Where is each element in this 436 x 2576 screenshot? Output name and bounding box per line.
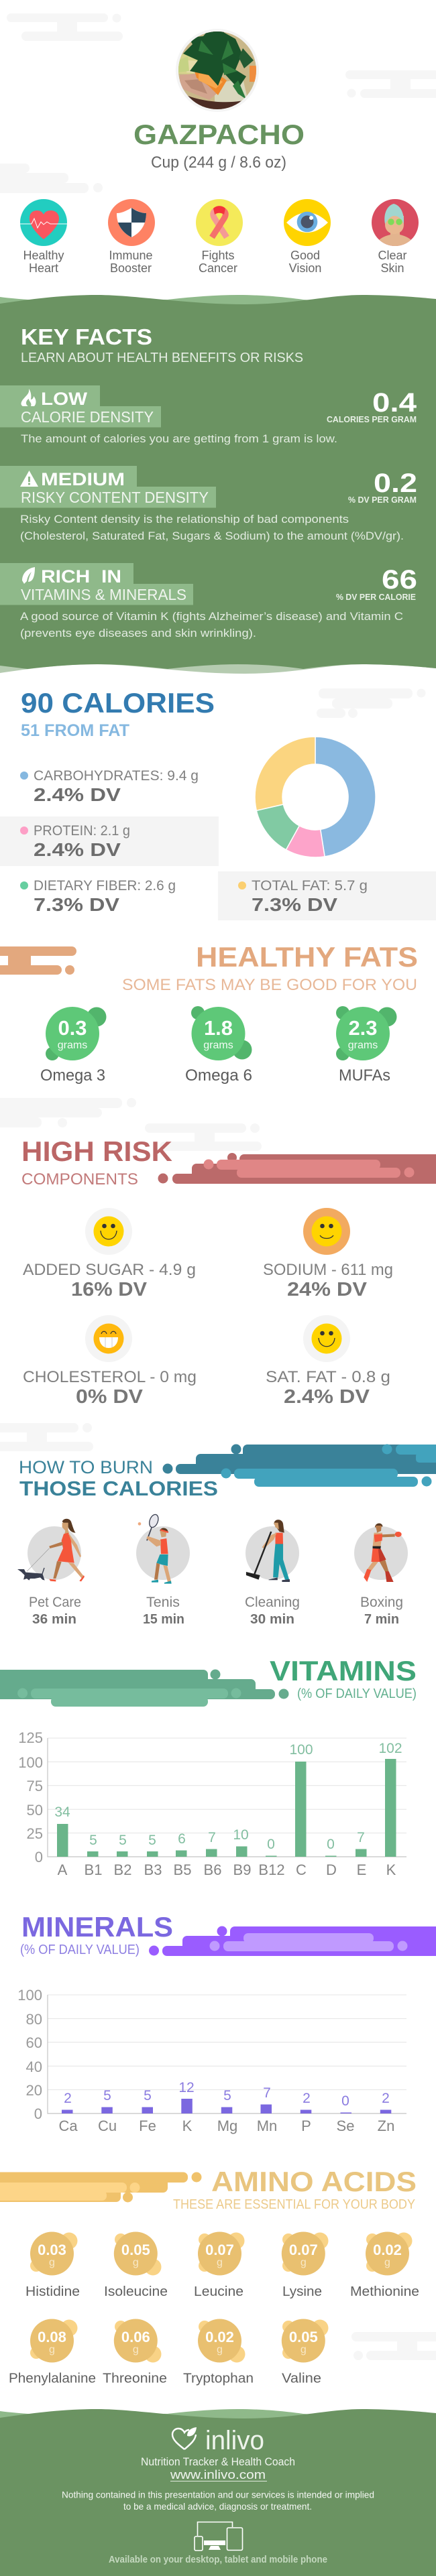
amino acid: tryptophan: 0.02 (205, 2329, 234, 2345)
bar chart: vitamins: B3 (144, 1861, 162, 1878)
label: fights cancer: Fights (201, 249, 235, 262)
subheading: LEARN ABOUT HEALTH BENEFITS OR RISKS (21, 351, 303, 365)
activity: tennis: Tenis (146, 1595, 180, 1610)
bar chart: vitamins: B5 (174, 1861, 191, 1878)
amino acid: leucine: g (217, 2257, 223, 2268)
activity: cleaning (245, 1520, 300, 1627)
bar chart: minerals: 20 (26, 2082, 42, 2099)
label: healthy heart: Heart (29, 261, 58, 275)
title: GAZPACHO (133, 119, 305, 150)
bar chart: vitamins: 7 (357, 1830, 365, 1845)
fat: omega 3 (40, 1007, 106, 1085)
legend: carbohydrates: 2.4% DV (34, 784, 121, 805)
panel: calories (0, 687, 436, 920)
bar chart: vitamins: 0 (267, 1837, 275, 1852)
label: clear skin: Clear (378, 249, 407, 262)
amino acid: histidine (25, 2232, 80, 2299)
bar chart: vitamins: B2 (114, 1861, 131, 1878)
panel: how to burn those calories (17, 1444, 436, 1627)
legend: protein (0, 816, 219, 866)
bar chart: vitamins: 5 (119, 1833, 127, 1848)
bar chart: vitamins: 10 (233, 1827, 249, 1843)
fact: medium risky content density: (Cholesterol, Saturated Fat, Sugars & Sodium) to the amount (%DV/gr). (20, 530, 404, 542)
item: added sugar (23, 1208, 196, 1300)
label: good vision: Vision (289, 261, 321, 275)
bar chart: minerals: 12 (178, 2080, 195, 2095)
fat: omega 3: Omega 3 (40, 1066, 105, 1085)
bar chart: vitamins: K (386, 1861, 396, 1878)
item: saturated fat: 2.4% DV (284, 1386, 370, 1408)
legend: dietary fiber (20, 878, 176, 915)
amino acid: isoleucine: 0.05 (121, 2242, 150, 2258)
subheading: components: COMPONENTS (21, 1170, 138, 1188)
fat: omega 3: grams (58, 1040, 87, 1051)
activity: cleaning: Cleaning (245, 1595, 300, 1610)
fat: mufas (336, 1006, 397, 1085)
legend: total fat: TOTAL FAT: 5.7 g (252, 878, 368, 894)
bar chart: minerals: 2 (382, 2091, 390, 2106)
item: added sugar: 16% DV (71, 1279, 148, 1300)
bar chart: vitamins: A (58, 1861, 68, 1878)
icon: clear skin face (372, 199, 419, 248)
fat: mufas: grams (348, 1040, 378, 1051)
bar chart: vitamins: 5 (148, 1833, 156, 1848)
bar chart: vitamins: B9 (233, 1861, 251, 1878)
label: immune booster: Immune (109, 249, 153, 262)
activity: boxing: 7 min (364, 1612, 399, 1627)
amino acid: valine: g (301, 2344, 307, 2355)
activity: pet care: 36 min (32, 1612, 76, 1627)
disclaimer: to be a medical advice, diagnosis or treatment. (123, 2501, 312, 2512)
logo: inlivo (205, 2426, 264, 2455)
amino acid: methionine: g (384, 2257, 390, 2268)
subheading: (% OF DAILY VALUE) (20, 1943, 140, 1957)
bar chart: minerals: 7 (263, 2085, 271, 2101)
fact: rich in vitamins and minerals: RICH IN (41, 566, 121, 587)
fact: rich in vitamins and minerals: (prevents eye diseases and skin wrinkling). (20, 627, 256, 639)
activity: pet care: Pet Care (29, 1595, 81, 1610)
bar chart: minerals: Ca (58, 2118, 78, 2134)
fact: low calorie density: The amount of calories you are getting from 1 gram is low. (21, 432, 337, 445)
amino acid: tryptophan: g (217, 2344, 223, 2355)
bar chart: vitamins: 0 (35, 1849, 43, 1865)
amino acid: histidine: g (49, 2257, 55, 2268)
bar chart: minerals: 5 (144, 2088, 152, 2103)
amino acid: valine: 0.05 (289, 2329, 318, 2345)
heading: vitamins: VITAMINS (270, 1655, 417, 1686)
bar chart: vitamins: 6 (178, 1831, 186, 1847)
bar chart: vitamins (18, 1729, 406, 1878)
bar chart: vitamins: 5 (89, 1833, 97, 1848)
subheading: THESE ARE ESSENTIAL FOR YOUR BODY (173, 2197, 415, 2212)
bar chart: vitamins: 34 (54, 1804, 70, 1820)
fact: low calorie density: CALORIES PER GRAM (327, 414, 417, 424)
fat: mufas: 2.3 (348, 1016, 378, 1040)
legend: carbohydrates: CARBOHYDRATES: 9.4 g (34, 768, 199, 784)
amino acid: tryptophan (183, 2319, 254, 2386)
amino acid: lysine: g (301, 2257, 307, 2268)
icon: healthy heart (20, 199, 67, 246)
bar chart: minerals: P (301, 2118, 311, 2134)
activity: tennis (136, 1514, 190, 1627)
bar chart: vitamins: 50 (27, 1802, 43, 1819)
benefit icons (20, 199, 419, 275)
amino acid: threonine (103, 2319, 167, 2386)
bar chart: vitamins: 100 (289, 1742, 313, 1758)
amino acid: methionine (350, 2232, 419, 2299)
item: sodium: SODIUM - 611 mg (263, 1261, 393, 1279)
food photo (176, 28, 259, 115)
amino acid: phenylalanine: g (49, 2344, 55, 2355)
legend: protein: PROTEIN: 2.1 g (34, 823, 130, 839)
amino acid: histidine: 0.03 (38, 2242, 66, 2258)
heading: amino acids: AMINO ACIDS (211, 2166, 417, 2197)
icon: immune booster shield (108, 199, 155, 246)
label: immune booster: Booster (110, 261, 152, 275)
amino acid: threonine: Threonine (103, 2372, 167, 2386)
figure: tennis player (138, 1514, 172, 1584)
bar chart: minerals: 40 (26, 2059, 42, 2075)
item: cholesterol: 0% DV (76, 1386, 144, 1408)
bar chart: vitamins: D (326, 1861, 337, 1878)
bar chart: minerals: 2 (64, 2091, 72, 2106)
bar chart: vitamins: 25 (27, 1825, 43, 1842)
heading: 90 calories: 90 CALORIES (21, 687, 215, 719)
activity: cleaning: 30 min (250, 1612, 294, 1627)
heading: high risk: HIGH RISK (21, 1136, 172, 1167)
fact: medium risky content density (0, 466, 417, 542)
bar chart: vitamins: 0 (327, 1837, 335, 1852)
heading: those calories: THOSE CALORIES (19, 1477, 218, 1500)
heading: key facts: KEY FACTS (21, 324, 152, 349)
decorative banner (0, 1669, 288, 1707)
icon: flame (21, 389, 36, 406)
fact: medium risky content density: MEDIUM (41, 469, 125, 489)
panel: high risk components (21, 1136, 436, 1408)
decorative banner (149, 1926, 436, 1956)
decorative banner (158, 1153, 436, 1184)
figure: boxer (364, 1523, 402, 1582)
figure: person sweeping (246, 1520, 290, 1582)
tagline: Nutrition Tracker & Health Coach (141, 2455, 295, 2468)
panel: vitamins (0, 1655, 417, 1878)
bar chart: minerals (17, 1987, 406, 2134)
bar chart: minerals: Fe (139, 2118, 156, 2134)
bar chart: minerals: Cu (98, 2118, 117, 2134)
heading: minerals: MINERALS (21, 1911, 173, 1943)
bar chart: vitamins: B12 (258, 1861, 285, 1878)
fact: low calorie density: CALORIE DENSITY (21, 408, 154, 426)
amino acid: valine: Valine (282, 2372, 321, 2386)
disclaimer: Nothing contained in this presentation and our services is intended or implied (62, 2490, 374, 2500)
panel: amino acids (0, 2166, 419, 2386)
donut chart (255, 737, 376, 857)
fact: medium risky content density: RISKY CONTENT DENSITY (21, 489, 209, 506)
amino acid: histidine: Histidine (25, 2284, 80, 2299)
bar chart: minerals: 60 (26, 2034, 42, 2051)
fat: mufas: MUFAs (339, 1066, 390, 1085)
subheading: 51 from fat: 51 FROM FAT (21, 721, 129, 740)
fat: omega 6: 1.8 (204, 1016, 233, 1040)
legend: carbohydrates (20, 768, 199, 805)
figure: woman walking dog (17, 1519, 85, 1581)
amino acid: isoleucine (104, 2232, 168, 2299)
legend: total fat (218, 871, 436, 920)
activity: boxing (354, 1523, 408, 1627)
fact: rich in vitamins and minerals: % DV PER CALORIE (336, 592, 416, 602)
decorative banner (162, 1444, 436, 1487)
panel: key facts (0, 295, 436, 674)
bar chart: vitamins: 75 (27, 1778, 43, 1794)
legend: dietary fiber: DIETARY FIBER: 2.6 g (34, 878, 176, 894)
item: sodium (263, 1208, 393, 1300)
bar chart: minerals: 5 (223, 2088, 231, 2103)
bar chart: vitamins: B6 (204, 1861, 221, 1878)
icon: fights cancer ribbon (196, 199, 243, 246)
item: cholesterol: CHOLESTEROL - 0 mg (23, 1368, 197, 1386)
subheading: (% OF DAILY VALUE) (297, 1686, 417, 1701)
bar chart: minerals: Se (337, 2118, 354, 2134)
label: healthy heart: Healthy (23, 249, 64, 262)
item: saturated fat (266, 1315, 390, 1408)
heading: how to burn: HOW TO BURN (19, 1457, 153, 1477)
label: fights cancer: Cancer (199, 261, 237, 275)
fact: medium risky content density: Risky Content density is the relationship of bad components (20, 513, 349, 526)
icon: warning triangle (20, 471, 38, 487)
amino acid: methionine: Methionine (350, 2284, 419, 2299)
amino acid: leucine: 0.07 (205, 2242, 234, 2258)
amino acid: lysine (282, 2232, 329, 2299)
icon: leaf (22, 567, 35, 584)
amino acid: isoleucine: Isoleucine (104, 2284, 168, 2299)
logo (172, 2426, 264, 2455)
bar chart: vitamins: C (296, 1861, 307, 1878)
fact: rich in vitamins and minerals (0, 563, 417, 639)
fact: low calorie density: LOW (41, 389, 88, 409)
item: saturated fat: SAT. FAT - 0.8 g (266, 1368, 390, 1386)
label: clear skin: Skin (380, 261, 404, 275)
heading: healthy fats: HEALTHY FATS (196, 941, 418, 973)
fat: omega 3: 0.3 (58, 1016, 87, 1040)
fact: medium risky content density: % DV PER GRAM (348, 495, 417, 505)
bar chart: minerals: Mg (217, 2118, 237, 2134)
fact: medium risky content density: 0.2 (374, 469, 417, 498)
bar chart: minerals: 0 (341, 2093, 349, 2109)
icon: devices (195, 2522, 243, 2551)
bar chart: vitamins: 102 (378, 1741, 402, 1756)
amino acid: valine (282, 2319, 329, 2386)
fact: low calorie density: 0.4 (372, 388, 417, 418)
amino acid: phenylalanine (9, 2319, 96, 2386)
fact: rich in vitamins and minerals: VITAMINS & MINERALS (21, 586, 186, 603)
panel: minerals (17, 1911, 436, 2134)
footer (0, 2409, 436, 2576)
amino acid: leucine (194, 2232, 244, 2299)
bar chart: minerals: 80 (26, 2011, 42, 2028)
availability note: Available on your desktop, tablet and mobile phone (109, 2555, 327, 2565)
item: sodium: 24% DV (287, 1279, 368, 1300)
amino acid: lysine: Lysine (282, 2284, 322, 2299)
label: good vision: Good (290, 249, 320, 262)
bar chart: vitamins: 100 (18, 1754, 43, 1771)
bar chart: minerals: K (182, 2118, 193, 2134)
website: www.inlivo.com (170, 2468, 266, 2481)
amino acid: phenylalanine: Phenylalanine (9, 2372, 96, 2386)
fact: rich in vitamins and minerals: 66 (382, 565, 417, 595)
bar chart: minerals: 5 (103, 2088, 111, 2103)
fat: omega 6 (185, 1006, 252, 1085)
amino acid: lysine: 0.07 (289, 2242, 318, 2258)
header (133, 28, 305, 172)
serving size: Cup (244 g / 8.6 oz) (151, 154, 286, 172)
bar chart: minerals: 0 (34, 2105, 42, 2122)
activity: tennis: 15 min (143, 1612, 184, 1627)
item: cholesterol (23, 1315, 197, 1408)
legend: protein: 2.4% DV (34, 839, 121, 860)
amino acid: leucine: Leucine (194, 2284, 243, 2299)
legend: total fat: 7.3% DV (252, 894, 337, 915)
decorative banner (0, 2172, 201, 2203)
bar chart: minerals: 2 (303, 2091, 311, 2106)
activity: pet care (17, 1519, 85, 1627)
item: added sugar: ADDED SUGAR - 4.9 g (23, 1261, 196, 1279)
bar chart: vitamins: 7 (208, 1830, 216, 1845)
amino acid: phenylalanine: 0.08 (38, 2329, 66, 2345)
bar chart: minerals: 100 (17, 1987, 42, 2004)
legend: dietary fiber: 7.3% DV (34, 894, 119, 915)
bar chart: vitamins: E (357, 1861, 366, 1878)
fact: low calorie density (0, 385, 417, 445)
fact: rich in vitamins and minerals: A good source of Vitamin K (fights Alzheimer’s disease) and Vitamin C (20, 610, 403, 623)
subheading: SOME FATS MAY BE GOOD FOR YOU (122, 976, 417, 994)
amino acid: threonine: 0.06 (121, 2329, 150, 2345)
fat: omega 6: Omega 6 (185, 1066, 252, 1085)
bar chart: minerals: Mn (257, 2118, 277, 2134)
activity: boxing: Boxing (360, 1595, 403, 1610)
fat: omega 6: grams (203, 1040, 233, 1051)
amino acid: isoleucine: g (133, 2257, 139, 2268)
amino acid: methionine: 0.02 (373, 2242, 402, 2258)
panel: healthy fats (0, 941, 418, 1085)
decorative banner (0, 946, 76, 975)
amino acid: tryptophan: Tryptophan (183, 2372, 254, 2386)
bar chart: vitamins: B1 (85, 1861, 102, 1878)
amino acid: threonine: g (133, 2344, 139, 2355)
icon: good vision eye (284, 199, 331, 246)
bar chart: vitamins: 125 (18, 1729, 43, 1746)
bar chart: minerals: Zn (378, 2118, 394, 2134)
